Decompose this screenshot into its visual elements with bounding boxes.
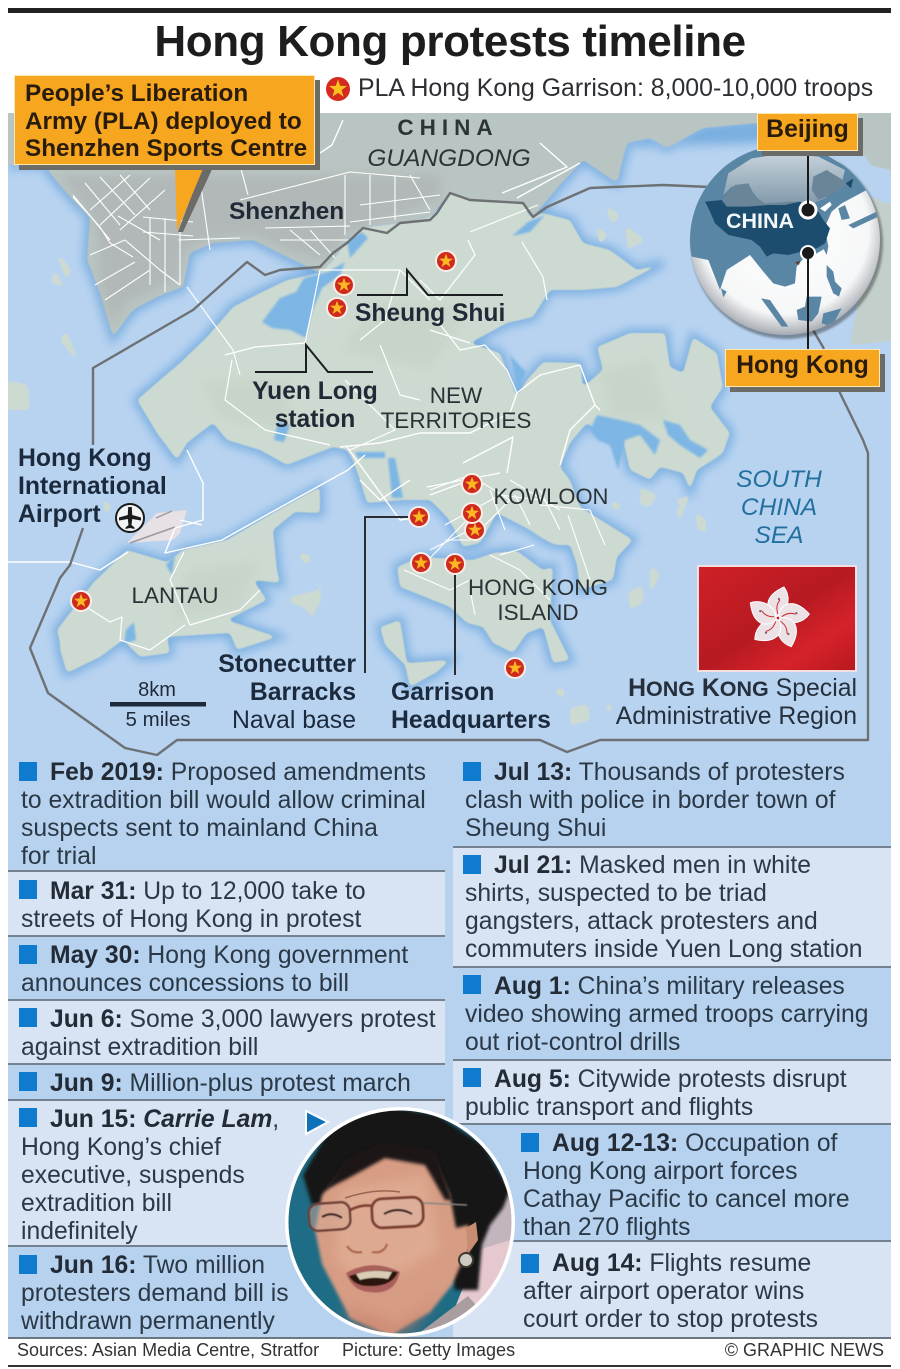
caption: Hong Kong SAR <box>616 675 857 730</box>
entry: Aug 14: Aug 14: Flights resume <box>552 1250 811 1277</box>
entry: Jun 15: executive, suspends <box>21 1162 245 1189</box>
label: South China Sea <box>736 466 822 549</box>
label: China on globe: CHINA <box>726 209 794 233</box>
entry: Jun 9 <box>8 1063 445 1099</box>
entry: Aug 14: after airport operator wins <box>523 1278 804 1305</box>
entry: Jul 21: commuters inside Yuen Long station <box>465 936 863 963</box>
label: Hong Kong International Airport: International <box>18 473 167 500</box>
entry: Jul 13 <box>463 759 845 842</box>
label: Stonecutter Barracks: Naval base <box>232 707 356 734</box>
entry: Feb 2019 <box>19 759 426 870</box>
coast glow <box>8 123 870 687</box>
entry: Feb 2019: suspects sent to mainland China <box>21 815 378 842</box>
entry: Aug 1: video showing armed troops carrying <box>465 1001 868 1028</box>
panel: right timeline column <box>453 759 891 1337</box>
callout: Beijing: Beijing <box>766 116 849 143</box>
caption: Hong Kong SAR: HONG KONG Special <box>628 675 857 702</box>
label: Hong Kong Island: HONG KONG <box>468 575 608 600</box>
callout: PLA deployment <box>14 75 320 232</box>
entry: Jun 15: indefinitely <box>21 1218 138 1245</box>
entry: Jul 13: Jul 13: Thousands of protesters <box>494 759 845 786</box>
label: Guangdong: GUANGDONG <box>367 145 531 172</box>
label: Yuen Long station <box>252 378 378 433</box>
legend: PLA Hong Kong Garrison: PLA Hong Kong Garrison: 8,000-10,000 troops <box>358 75 873 102</box>
panel: left timeline column <box>8 759 445 1335</box>
label: Hong Kong International Airport: Airport <box>18 501 101 528</box>
entry: Jun 6: Jun 6: Some 3,000 lawyers protest <box>50 1006 436 1033</box>
label: Garrison Headquarters: Headquarters <box>391 707 551 734</box>
source line: Picture: Getty Images <box>342 1340 515 1360</box>
entry: Mar 31 <box>8 870 445 935</box>
callout: Hong Kong <box>725 349 880 387</box>
leader: Yuen Long station <box>255 345 373 372</box>
top rule <box>8 8 891 13</box>
footer rule <box>8 1337 891 1339</box>
garrison markers <box>70 250 526 679</box>
entry: Jul 21: shirts, suspected to be triad <box>465 880 767 907</box>
entry: Jun 15: Hong Kong’s chief <box>21 1134 221 1161</box>
globe locator <box>685 140 883 349</box>
entry: Jun 6 <box>8 999 445 1063</box>
entry: Aug 14: court order to stop protests <box>523 1306 818 1333</box>
entry: Jun 15: Jun 15: Carrie Lam, <box>50 1106 279 1133</box>
flag <box>697 565 857 672</box>
leader: Stonecutter Barracks <box>365 517 419 673</box>
entry: Feb 2019: for trial <box>21 843 96 870</box>
label: China: CHINA <box>397 115 499 140</box>
entry: Aug 5: Aug 5: Citywide protests disrupt <box>494 1066 847 1093</box>
entry: Jun 15: extradition bill <box>21 1190 172 1217</box>
label: Hong Kong International Airport: Hong Kong <box>18 445 152 472</box>
icon: pointer to Carrie Lam <box>305 1110 330 1136</box>
entry: Mar 31: Mar 31: Up to 12,000 take to <box>50 878 366 905</box>
callout: Hong Kong: Hong Kong <box>736 352 869 379</box>
entry: Jun 15 <box>8 1099 445 1245</box>
photo: Carrie Lam <box>285 1107 515 1337</box>
entry: Aug 5: public transport and flights <box>465 1094 753 1121</box>
label: Hong Kong Island: ISLAND <box>497 600 579 625</box>
label: Garrison Headquarters <box>391 679 551 734</box>
entry: May 30: May 30: Hong Kong government <box>50 942 408 969</box>
label: Shenzhen: Shenzhen <box>229 198 344 225</box>
entry: Jul 13: clash with police in border town of <box>465 787 836 814</box>
label: South China Sea: SOUTH <box>736 466 822 493</box>
label: scale: 8km <box>138 679 176 701</box>
land: Shenzhen urban area <box>60 175 440 325</box>
label: New Territories: NEW <box>430 383 482 408</box>
label: Stonecutter Barracks: Barracks <box>250 679 356 706</box>
entry: Jul 21: Jul 21: Masked men in white <box>494 852 811 879</box>
entry: Jun 9: Jun 9: Million-plus protest march <box>50 1070 411 1097</box>
airport <box>127 510 187 543</box>
label: Yuen Long station: station <box>275 406 355 433</box>
entry: May 30 <box>8 935 445 999</box>
label: South China Sea: SEA <box>754 522 804 549</box>
leader: Sheung Shui <box>357 270 503 295</box>
entry: May 30: announces concessions to bill <box>21 970 349 997</box>
label: scale miles: 5 miles <box>126 708 190 731</box>
entry: Aug 12-13: Hong Kong airport forces <box>523 1158 797 1185</box>
callout: PLA deployment: People’s Liberation <box>25 80 248 107</box>
entry: Jun 16: withdrawn permanently <box>21 1308 275 1335</box>
water: wetlands and inlets <box>124 215 708 644</box>
entry: Jun 16 <box>8 1245 445 1338</box>
entry: Aug 12-13: than 270 flights <box>523 1214 690 1241</box>
source line: Sources: Asian Media Centre, Stratfor <box>17 1340 319 1360</box>
entry: Jul 21: gangsters, attack protesters and <box>465 908 818 935</box>
sea <box>8 113 891 758</box>
entry: Aug 12-13: Cathay Pacific to cancel more <box>523 1186 850 1213</box>
entry: Jul 21 <box>453 846 891 966</box>
land: China <box>0 105 900 337</box>
label: Yuen Long station: Yuen Long <box>252 378 378 405</box>
label: New Territories <box>381 383 531 433</box>
title: Hong Kong protests timeline <box>154 17 746 66</box>
entry: Jun 16: protesters demand bill is <box>21 1280 289 1307</box>
label: Sheung Shui: Sheung Shui <box>355 300 505 327</box>
entry: Aug 12-13 <box>453 1123 891 1240</box>
entry: Feb 2019: Feb 2019: Proposed amendments <box>50 759 426 786</box>
callout: PLA deployment: Army (PLA) deployed to <box>25 108 302 134</box>
map panel <box>8 113 891 757</box>
entry: Aug 1 <box>453 966 891 1059</box>
label: New Territories: TERRITORIES <box>381 408 531 433</box>
entry: Jun 16: Jun 16: Two million <box>50 1252 265 1279</box>
label: Kowloon: KOWLOON <box>494 484 608 509</box>
label: Hong Kong Island <box>468 575 608 625</box>
entry: Jul 13: Sheung Shui <box>465 815 606 842</box>
entry: Feb 2019: to extradition bill would allow criminal <box>21 787 426 814</box>
label: Stonecutter Barracks: Stonecutter <box>218 651 356 678</box>
entry: Mar 31: streets of Hong Kong in protest <box>21 906 361 933</box>
Hong Kong boundary line <box>30 185 868 755</box>
land: Hong Kong <box>8 193 730 726</box>
callout: PLA deployment: Shenzhen Sports Centre <box>25 135 307 162</box>
credit: © GRAPHIC NEWS <box>725 1340 884 1360</box>
label: Lantau: LANTAU <box>131 583 219 608</box>
land: eastern China edge <box>850 195 900 345</box>
roads <box>8 120 605 650</box>
source line <box>17 1340 515 1360</box>
timeline background <box>8 757 891 1338</box>
entry: Aug 1: Aug 1: China’s military releases <box>494 973 845 1000</box>
entry: Aug 1: out riot-control drills <box>465 1029 680 1056</box>
entry: Aug 12-13: Aug 12-13: Occupation of <box>552 1130 837 1157</box>
label: South China Sea: CHINA <box>741 494 817 521</box>
entry: Aug 14 <box>453 1240 891 1338</box>
icon: airport plane <box>116 504 144 532</box>
label: Garrison Headquarters: Garrison <box>391 679 494 706</box>
callout: Beijing <box>757 113 858 151</box>
caption: Hong Kong SAR: Administrative Region <box>616 703 857 730</box>
label: Hong Kong International Airport <box>18 445 167 528</box>
entry: Jun 6: against extradition bill <box>21 1034 258 1061</box>
leader: Garrison Headquarters <box>454 564 456 675</box>
bottom rule <box>8 1365 891 1367</box>
scale bar <box>110 702 206 706</box>
entry: Aug 5 <box>453 1059 891 1123</box>
label: Stonecutter Barracks <box>218 651 356 734</box>
